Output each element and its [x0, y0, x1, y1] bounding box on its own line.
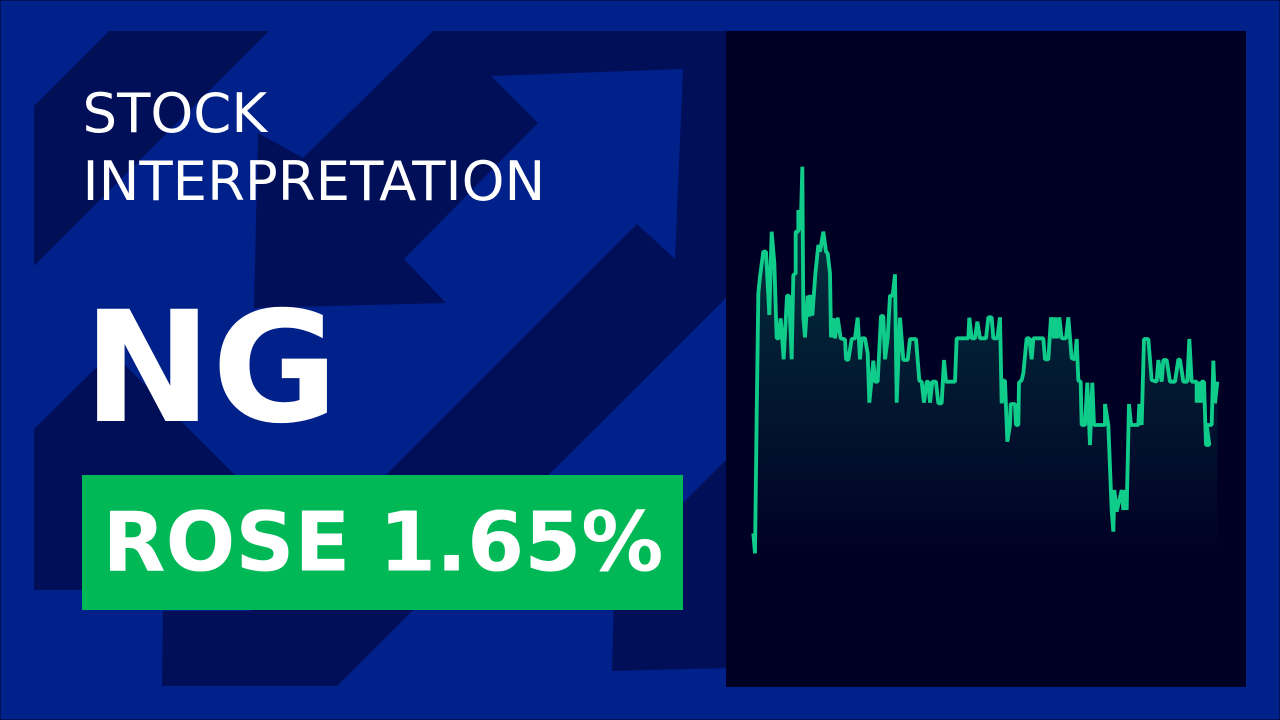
change badge [82, 475, 683, 610]
chart panel [726, 31, 1246, 687]
heading: stock interpretation [82, 81, 545, 213]
heading: stock interpretation: STOCK [82, 81, 268, 145]
change badge: ROSE 1.65% [102, 496, 663, 590]
price line chart [753, 167, 1217, 557]
ticker symbol: NG [83, 279, 338, 458]
heading: stock interpretation: INTERPRETATION [82, 149, 545, 213]
background arrow pattern [34, 31, 726, 686]
